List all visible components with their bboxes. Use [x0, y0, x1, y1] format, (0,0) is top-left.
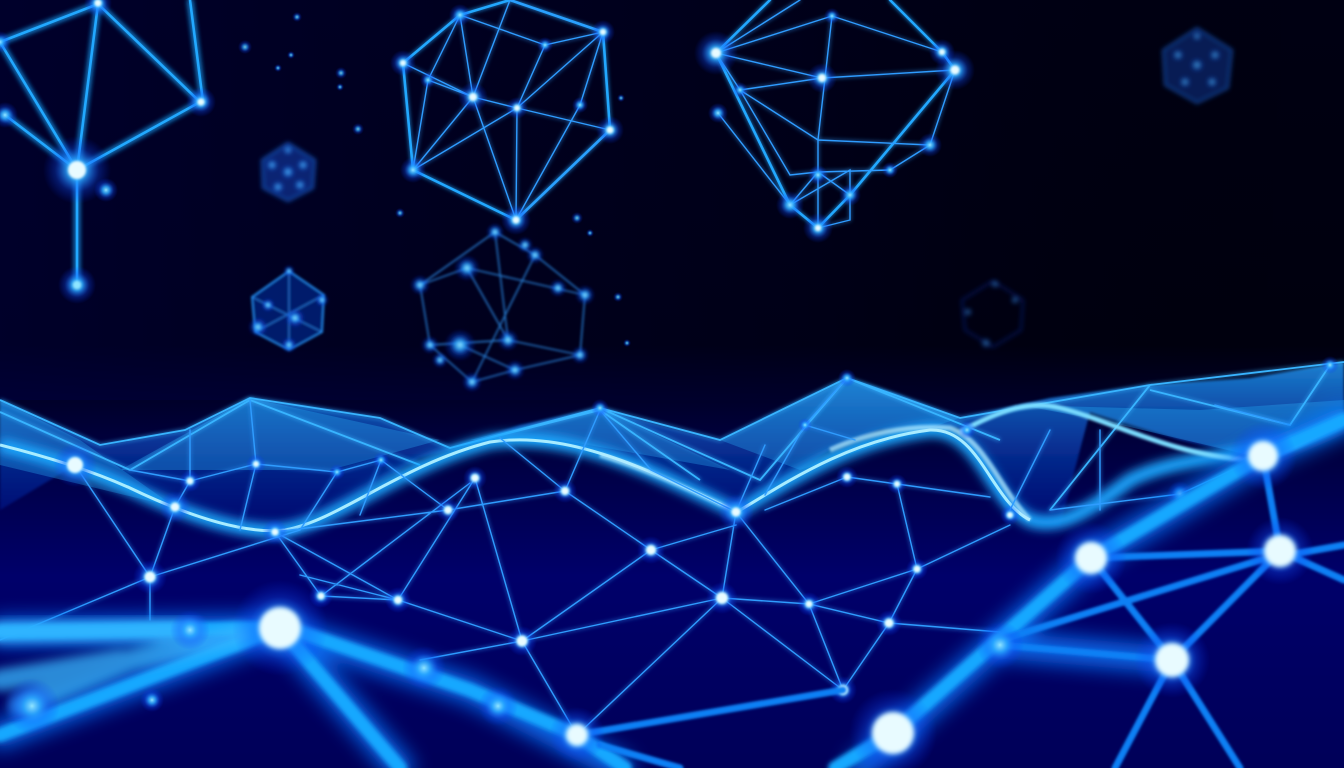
floating particles — [238, 12, 631, 347]
polyhedron: blurred centre — [410, 223, 595, 392]
polyhedron: top left — [0, 0, 216, 304]
small polyhedron: left upper — [262, 143, 315, 201]
small polyhedron: top far right — [1163, 28, 1232, 103]
small polyhedron: faint right — [962, 279, 1023, 349]
lower network: nodes — [53, 356, 1339, 704]
small polyhedron: left lower — [248, 265, 329, 353]
polyhedron: top right — [694, 0, 975, 243]
foreground: large glowing nodes — [4, 422, 1314, 768]
lower network: thin lines — [0, 378, 1290, 735]
polyhedron: top centre — [390, 0, 624, 235]
foreground: blurred thick beams — [0, 420, 1344, 768]
wave mesh: translucent band — [0, 362, 1344, 532]
wave mesh: glowing ribbon — [0, 405, 1344, 531]
outline and struts — [403, 0, 610, 220]
